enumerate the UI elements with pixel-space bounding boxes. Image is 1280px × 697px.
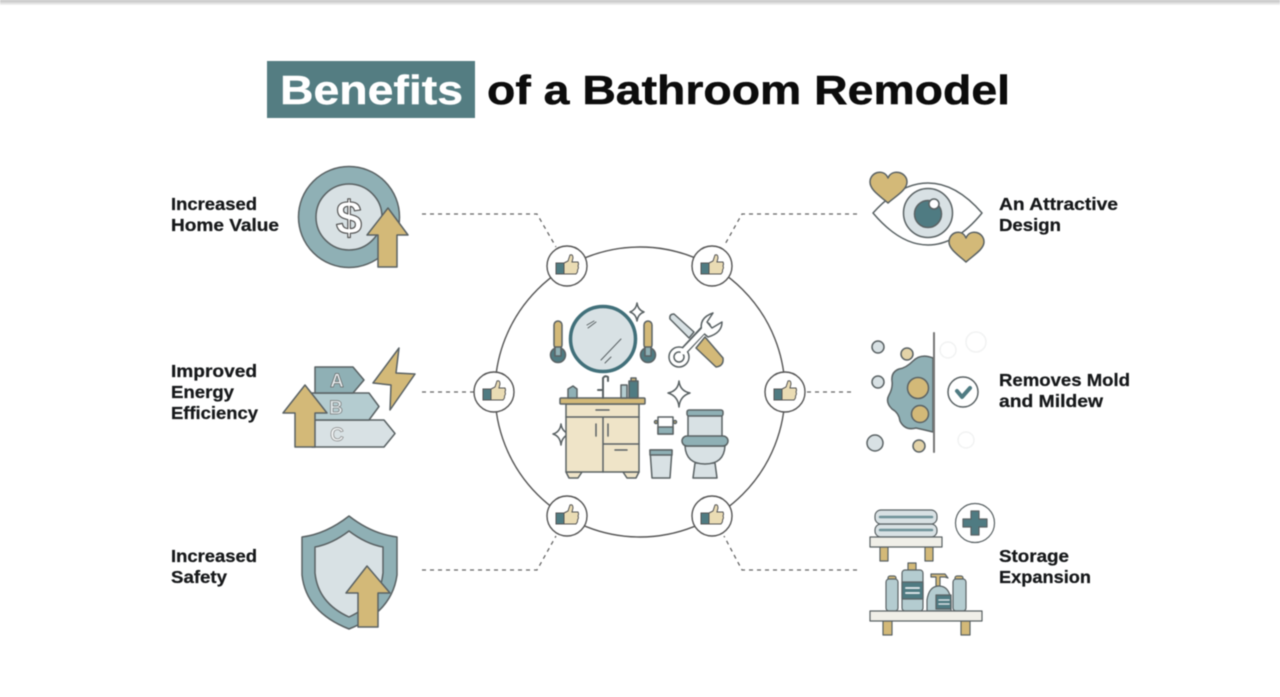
thumbs-up badge middle right — [765, 372, 805, 412]
mirror — [570, 306, 636, 372]
label: an attractive design: Design — [999, 215, 1061, 235]
sparkles — [553, 303, 690, 445]
thumbs-up badge top right — [692, 246, 732, 286]
icon: storage shelves — [870, 504, 994, 635]
label: increased home value: Home Value — [171, 215, 279, 235]
label: storage expansion: Storage — [999, 546, 1069, 566]
title — [267, 61, 1010, 118]
thumbs-up badge bottom left — [547, 496, 587, 536]
label: improved energy efficiency: Energy — [171, 382, 234, 402]
label: removes mold and mildew: Removes Mold — [999, 370, 1130, 390]
label: storage expansion: Expansion — [999, 567, 1091, 587]
label: improved energy efficiency: Efficiency — [171, 403, 258, 423]
label: increased home value: Increased — [171, 194, 257, 214]
label: improved energy efficiency: Improved — [171, 361, 257, 381]
label: increased safety: Increased — [171, 546, 257, 566]
toilet paper and bin — [650, 417, 676, 478]
icon: dollar coin with arrow — [298, 166, 408, 268]
connector lines — [422, 214, 857, 570]
thumbs-up badge middle left — [474, 372, 514, 412]
icon: shield with arrow — [302, 516, 397, 629]
label: increased safety: Safety — [171, 567, 227, 587]
icon: energy rating with bolt: C — [330, 425, 344, 446]
icon: energy rating with bolt — [283, 348, 415, 447]
label: removes mold and mildew: and Mildew — [999, 391, 1103, 411]
icon: mold and mildew — [867, 332, 986, 452]
thumbs-up badge top left — [547, 246, 587, 286]
vanity — [560, 376, 645, 478]
icon: energy rating with bolt: B — [329, 398, 343, 419]
central circle — [495, 247, 785, 537]
icon: dollar coin with arrow: $ — [336, 191, 362, 244]
icon: energy rating with bolt: A — [330, 371, 344, 392]
title: of a Bathroom Remodel — [487, 67, 1010, 113]
icon: bathroom illustration — [550, 303, 728, 478]
thumbs-up badge bottom right — [692, 496, 732, 536]
sconces — [550, 321, 656, 362]
icon: eye with hearts — [870, 172, 984, 262]
toilet — [682, 410, 728, 478]
tools — [669, 313, 723, 367]
label: an attractive design: An Attractive — [999, 194, 1118, 214]
title: Benefits — [280, 67, 463, 113]
